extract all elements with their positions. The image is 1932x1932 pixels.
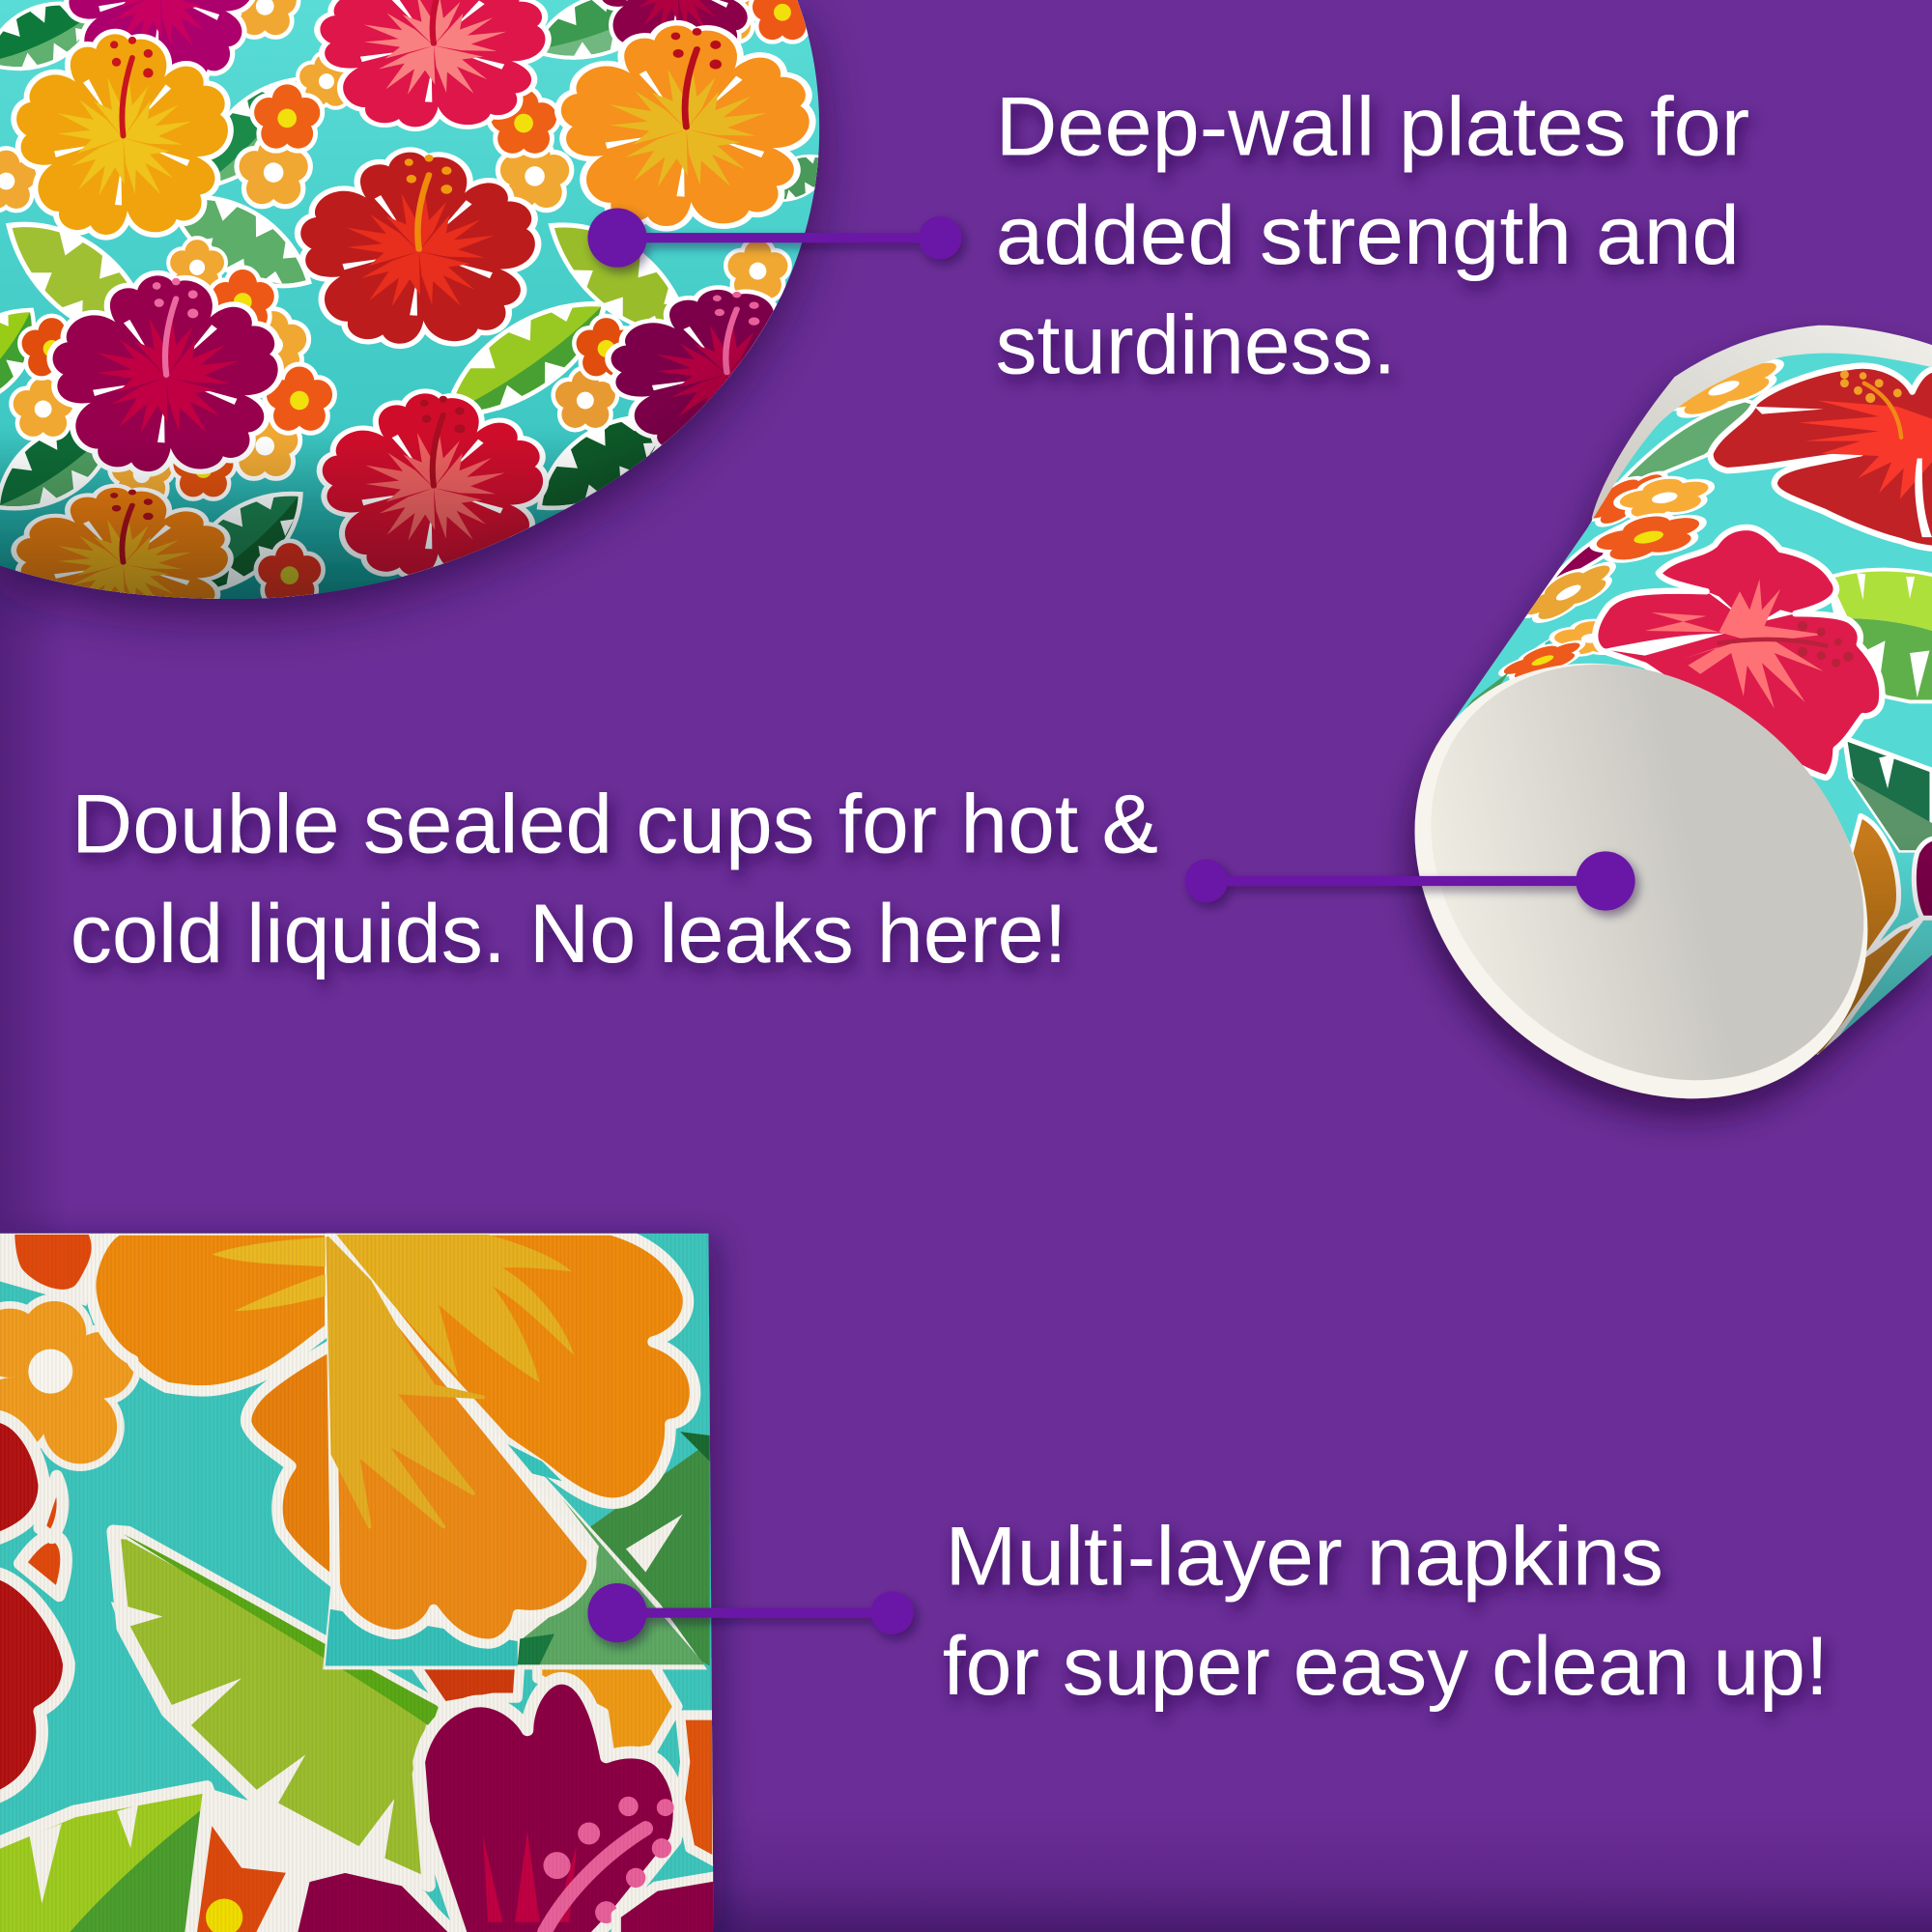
napkin lower left leaf xyxy=(0,1786,212,1932)
cup dark green leaf xyxy=(1844,738,1932,850)
napkin large green leaf xyxy=(111,1531,439,1886)
text: cups: Double sealed cups for hot & xyxy=(71,778,1158,871)
text: plates xyxy=(996,80,1749,391)
cup magenta petal xyxy=(1914,838,1932,918)
napkin amber small flower xyxy=(0,1301,134,1463)
text: plates: Deep-wall plates for xyxy=(996,80,1749,174)
flap teal strip xyxy=(326,1609,518,1665)
napkin left orange yellow rays xyxy=(212,1237,326,1311)
napkin orange flower right of fold xyxy=(330,1230,696,1503)
cup lower orange petals xyxy=(1811,815,1922,1060)
napkin red flower at left edge xyxy=(0,1416,69,1799)
text: cups xyxy=(71,778,1158,980)
napkin lower magenta petals xyxy=(291,1868,721,1932)
text: napkins xyxy=(943,1509,1829,1713)
plate hibiscus flowers xyxy=(11,0,816,599)
plate leaves xyxy=(0,0,838,616)
cup thin green leaf xyxy=(1623,401,1776,479)
folded napkin xyxy=(0,1230,721,1932)
cup base inner disc xyxy=(1348,579,1932,1166)
text: plates: added strength and xyxy=(996,188,1740,282)
napkin red-orange small flower xyxy=(197,1826,286,1932)
napkin red-orange petal top left xyxy=(14,1235,92,1290)
flap orange petal xyxy=(330,1235,591,1644)
napkin magenta flower xyxy=(419,1678,679,1932)
callout line: plate xyxy=(587,209,962,268)
napkin right green leaf xyxy=(586,1432,710,1665)
cup bright green leaf xyxy=(1830,571,1932,699)
cup small print flowers xyxy=(1464,359,1784,710)
cup body with print xyxy=(1441,345,1932,1084)
cup base rim xyxy=(1327,574,1932,1188)
text: napkins: Multi-layer napkins xyxy=(945,1509,1663,1603)
flap yellow rays xyxy=(327,1238,483,1526)
paper cup xyxy=(1391,325,1932,1138)
napkin amber and orange petals below fold xyxy=(414,1663,717,1863)
callout line: cup xyxy=(1184,851,1635,911)
napkin bottom centre background xyxy=(185,1786,456,1932)
flap green leaf xyxy=(518,1498,705,1664)
text: plates: sturdiness. xyxy=(996,298,1396,391)
napkin orange flower left of fold xyxy=(91,1230,335,1583)
cup pink hibiscus xyxy=(1595,527,1882,778)
flap teal mark xyxy=(508,1444,562,1481)
callout line: napkin xyxy=(587,1583,914,1642)
napkin folded flap xyxy=(323,1235,707,1669)
text: napkins: for super easy clean up! xyxy=(943,1619,1829,1713)
napkin yellow rays right of fold xyxy=(330,1235,574,1382)
cup red hibiscus xyxy=(1710,366,1932,550)
plate with hibiscus pattern xyxy=(0,0,854,648)
text: cups: cold liquids. No leaks here! xyxy=(71,887,1067,980)
napkin white top left area xyxy=(0,1233,111,1306)
cup rim xyxy=(1592,326,1932,542)
plate small flowers xyxy=(0,0,812,605)
